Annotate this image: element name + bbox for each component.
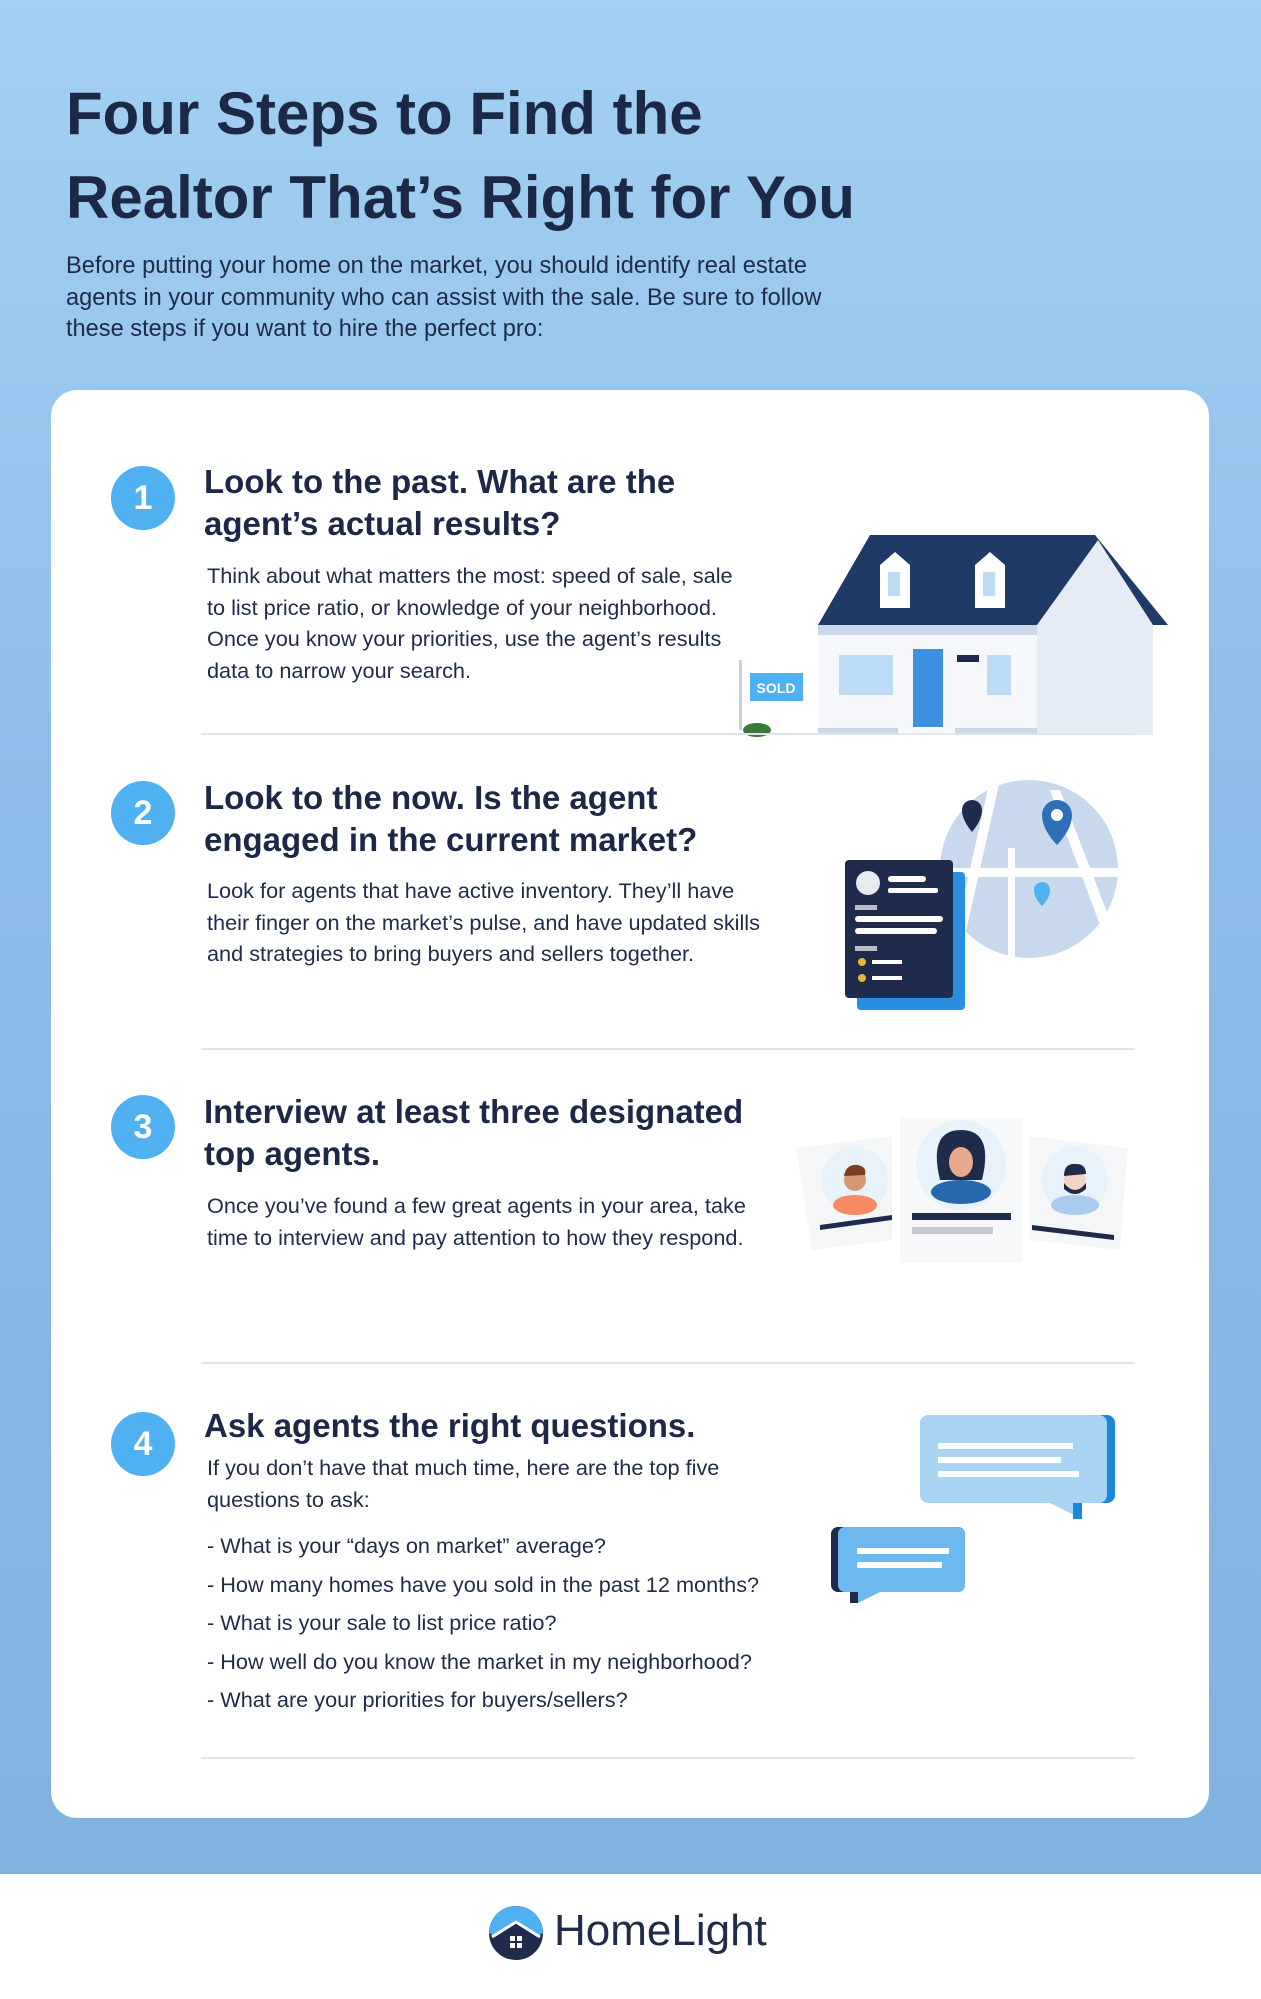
step 4 body and questions: - How well do you know the market in my neighborhood? [207,1648,752,1674]
step 4 body and questions: - How many homes have you sold in the past 12 months? [207,1572,759,1596]
step 2 heading [204,779,697,858]
step 2 body [207,878,760,966]
panel: steps card [51,390,1209,1818]
illustration: house with sold sign: SOLD [757,680,795,696]
step 4 number [111,1412,175,1476]
title: Realtor That’s Right for You [66,164,855,231]
step 1 body: Once you know your priorities, use the agent’s results [207,626,721,651]
step 4 body and questions: - What are your priorities for buyers/sellers? [207,1687,628,1712]
step 2 body: and strategies to bring buyers and sellers together. [207,941,694,966]
step 2 heading: engaged in the current market? [204,821,697,858]
illustration: three agent cards [796,1120,1128,1250]
step 3 heading [204,1093,743,1172]
title: Four Steps to Find the [66,80,703,147]
intro text: Before putting your home on the market, you should identify real estate [66,253,807,279]
illustration: house with sold sign [739,535,1168,737]
step 1 number: 1 [134,479,152,517]
step 4 body and questions: - What is your “days on market” average? [207,1533,606,1558]
step 1 heading: Look to the past. What are the [204,463,675,500]
footer [0,1874,1261,1999]
intro text: agents in your community who can assist with the sale. Be sure to follow [66,284,821,310]
step 1 heading [204,463,675,542]
step 1 body [207,563,733,682]
step 3 heading: Interview at least three designated [204,1093,743,1130]
icon: homelight house [489,1906,543,1960]
step 1 body: Think about what matters the most: speed of sale, sale [207,563,733,588]
step 2 body: Look for agents that have active inventory. They’ll have [207,878,734,903]
step 3 number: 3 [134,1108,152,1146]
step 2 body: their finger on the market’s pulse, and have updated skills [207,910,760,934]
logo [489,1906,767,1960]
illustration: chat bubbles [831,1415,1115,1603]
step 4 heading: Ask agents the right questions. [204,1407,695,1444]
step 3 body [207,1193,746,1250]
intro text: these steps if you want to hire the perfect pro: [66,316,543,342]
title [66,80,855,231]
logo text: HomeLight [554,1906,767,1955]
step 4 body and questions: questions to ask: [207,1486,370,1512]
step 3 heading: top agents. [204,1135,380,1172]
step 4 body and questions: - What is your sale to list price ratio? [207,1610,557,1635]
step 4 body and questions: If you don’t have that much time, here are the top five [207,1455,719,1480]
step 1 number [111,466,175,530]
step 4 body and questions [207,1455,759,1712]
step 3 body: time to interview and pay attention to how they respond. [207,1224,743,1250]
divider [201,1757,1135,1759]
step 3 number [111,1095,175,1159]
step 1 heading: agent’s actual results? [204,505,560,542]
divider [201,1362,1135,1364]
step 2 number: 2 [134,794,152,832]
divider [201,1048,1135,1050]
step 1 body: data to narrow your search. [207,658,471,682]
illustration: map and agent profile [845,780,1118,1010]
step 2 number [111,781,175,845]
step 1 body: to list price ratio, or knowledge of your neighborhood. [207,594,717,620]
step 3 body: Once you’ve found a few great agents in your area, take [207,1193,746,1218]
divider [201,733,1135,735]
intro text [66,253,822,342]
step 4 number: 4 [134,1425,152,1463]
step 2 heading: Look to the now. Is the agent [204,779,657,816]
